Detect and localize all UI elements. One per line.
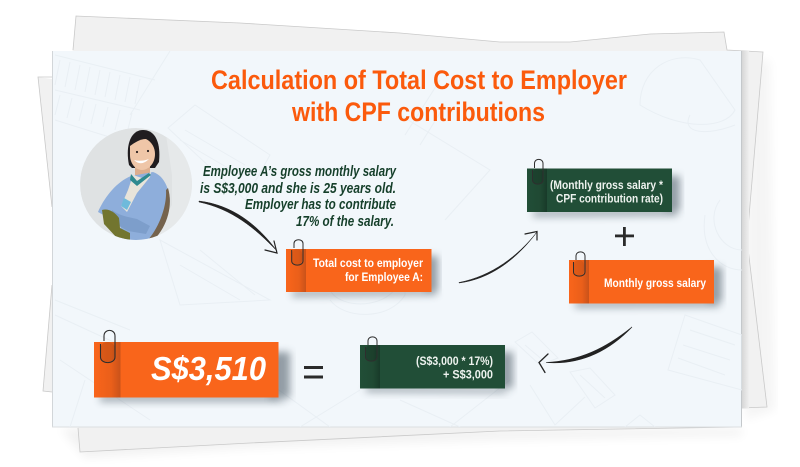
tag: result S$3,510 — [94, 330, 290, 402]
tag: total cost to employer — [286, 240, 438, 297]
tag: contribution formula: CPF contribution rate) — [556, 192, 663, 206]
tag: total cost to employer: for Employee A: — [345, 270, 423, 284]
employee description — [200, 163, 396, 230]
faint background pattern — [55, 51, 742, 427]
employee photo — [80, 128, 192, 240]
title: Calculation of Total Cost to Employer — [211, 65, 627, 95]
tag: monthly gross salary: Monthly gross salary — [604, 276, 706, 290]
employee description: Employee A’s gross monthly salary — [203, 163, 396, 180]
arrow: monthly salary to substituted formula — [539, 327, 632, 372]
employee description: is S$3,000 and she is 25 years old. — [200, 180, 396, 197]
plus sign — [615, 227, 634, 246]
neck — [135, 166, 150, 176]
face — [130, 139, 155, 170]
tag: substituted formula — [360, 337, 513, 393]
tag: total cost to employer: Total cost to employer — [313, 256, 423, 270]
folded arms — [112, 210, 150, 234]
tag: result S$3,510: S$3,510 — [151, 350, 267, 387]
hair back — [128, 130, 159, 168]
employee description: 17% of the salary. — [296, 213, 394, 230]
arrow: description to total cost — [199, 201, 277, 253]
main sheet — [52, 51, 742, 427]
tag: substituted formula: (S$3,000 * 17%) — [416, 354, 493, 368]
arrow: total cost to formula — [459, 232, 537, 283]
title: with CPF contributions — [291, 97, 545, 127]
tag: monthly gross salary — [569, 252, 722, 308]
scarf — [121, 172, 151, 212]
shirt — [98, 172, 170, 240]
equals sign — [304, 366, 323, 378]
title — [211, 65, 627, 127]
tag: contribution formula: (Monthly gross salary * — [550, 178, 663, 192]
tag: substituted formula: + S$3,000 — [443, 368, 493, 382]
employee description: Employer has to contribute — [245, 196, 396, 213]
tag: contribution formula — [527, 159, 680, 217]
